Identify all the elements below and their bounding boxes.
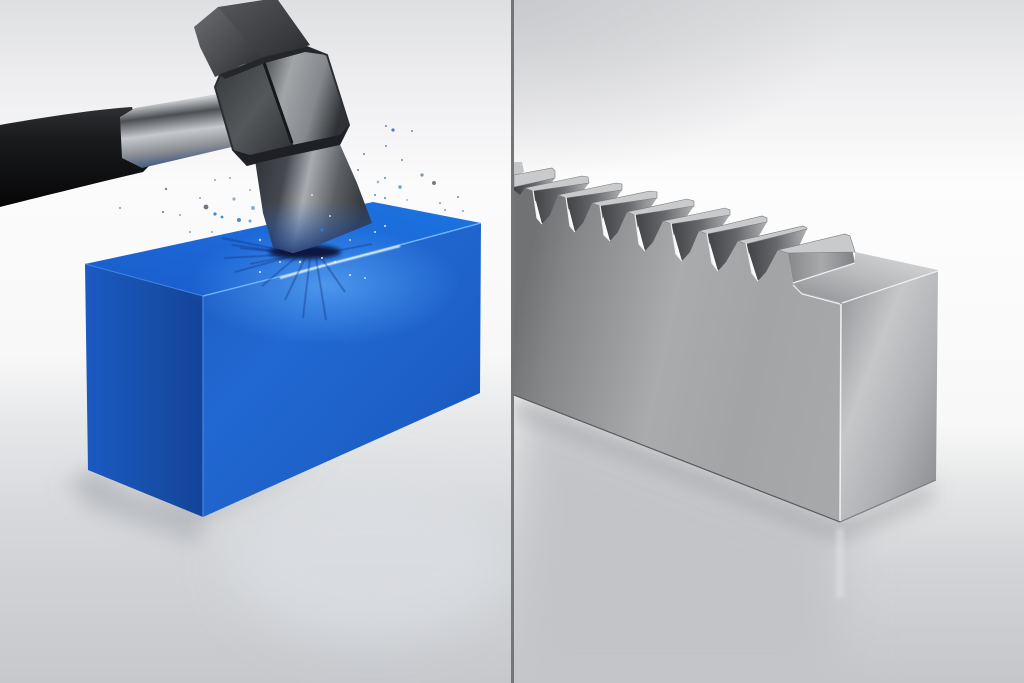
debris particles	[119, 125, 464, 279]
tooth crests	[514, 168, 855, 253]
hammer	[0, 0, 372, 253]
reflection of rack on floor	[836, 528, 844, 598]
hammer handle	[0, 107, 150, 207]
tooth back flanks	[514, 178, 807, 281]
impact glow and rays	[214, 237, 436, 334]
rack edge highlights	[514, 190, 938, 522]
shadow under blue block	[68, 466, 271, 544]
hammer claw	[194, 0, 310, 77]
shadow under rack	[514, 398, 936, 540]
hammer neck	[120, 94, 236, 168]
rack front face	[514, 188, 841, 522]
hammer lower poll	[255, 140, 372, 253]
panel: right background	[514, 0, 1024, 683]
block right face	[203, 223, 481, 517]
block left face	[85, 264, 203, 517]
top surface behind last tooth	[793, 252, 938, 303]
block top face	[85, 202, 481, 296]
blue block	[85, 202, 481, 517]
panel: hammer strikes blue block	[0, 0, 481, 545]
hammer head block	[215, 47, 349, 165]
divider	[511, 0, 514, 683]
rack right face	[840, 270, 938, 522]
block edge highlights	[85, 223, 481, 517]
panel: toothed steel rack	[514, 162, 938, 598]
far small tooth	[514, 162, 524, 176]
panel: left background	[0, 0, 511, 683]
last tooth flank	[788, 235, 855, 283]
